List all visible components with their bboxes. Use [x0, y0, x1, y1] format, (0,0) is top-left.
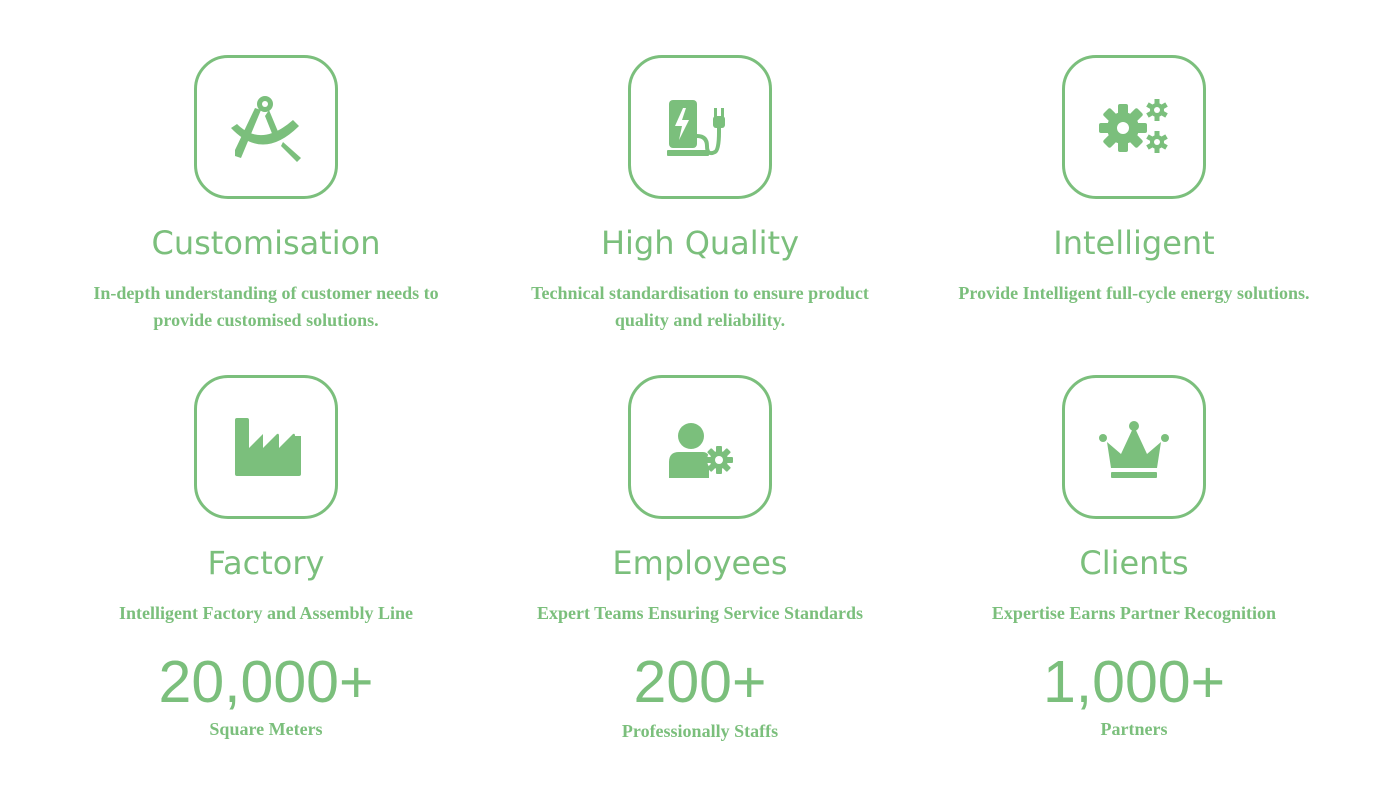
- title: Employees: [612, 544, 788, 582]
- number: 200+: [634, 649, 766, 715]
- title: Clients: [1079, 544, 1189, 582]
- subtitle: Intelligent Factory and Assembly Line: [119, 603, 413, 623]
- unit: Partners: [1100, 719, 1167, 739]
- icon: crown: [1062, 375, 1206, 519]
- card: Employees: [537, 375, 863, 741]
- number: 1,000+: [1043, 649, 1225, 715]
- title: Customisation: [151, 224, 381, 262]
- icon: compass: [194, 55, 338, 199]
- subtitle: Expertise Earns Partner Recognition: [992, 603, 1276, 623]
- card: High Quality: [531, 55, 869, 330]
- icon: charging station: [628, 55, 772, 199]
- icon: factory: [194, 375, 338, 519]
- card: Customisation: [93, 55, 439, 330]
- description: In-depth understanding of customer needs to: [93, 283, 439, 303]
- icon: gears: [1062, 55, 1206, 199]
- unit: Square Meters: [209, 719, 323, 739]
- description: Provide Intelligent full-cycle energy solutions.: [958, 283, 1310, 303]
- description: [93, 283, 439, 330]
- description: quality and reliability.: [615, 310, 785, 330]
- unit: Professionally Staffs: [622, 721, 778, 741]
- icon: user with gear: [628, 375, 772, 519]
- card: Intelligent: [958, 55, 1310, 303]
- description: provide customised solutions.: [153, 310, 379, 330]
- title: Intelligent: [1053, 224, 1215, 262]
- subtitle: Expert Teams Ensuring Service Standards: [537, 603, 863, 623]
- card: Clients: [992, 375, 1276, 739]
- title: High Quality: [601, 224, 799, 262]
- card: Factory: [119, 375, 413, 739]
- number: 20,000+: [159, 649, 373, 715]
- description: [531, 283, 869, 330]
- title: Factory: [208, 544, 324, 582]
- description: Technical standardisation to ensure product: [531, 283, 869, 303]
